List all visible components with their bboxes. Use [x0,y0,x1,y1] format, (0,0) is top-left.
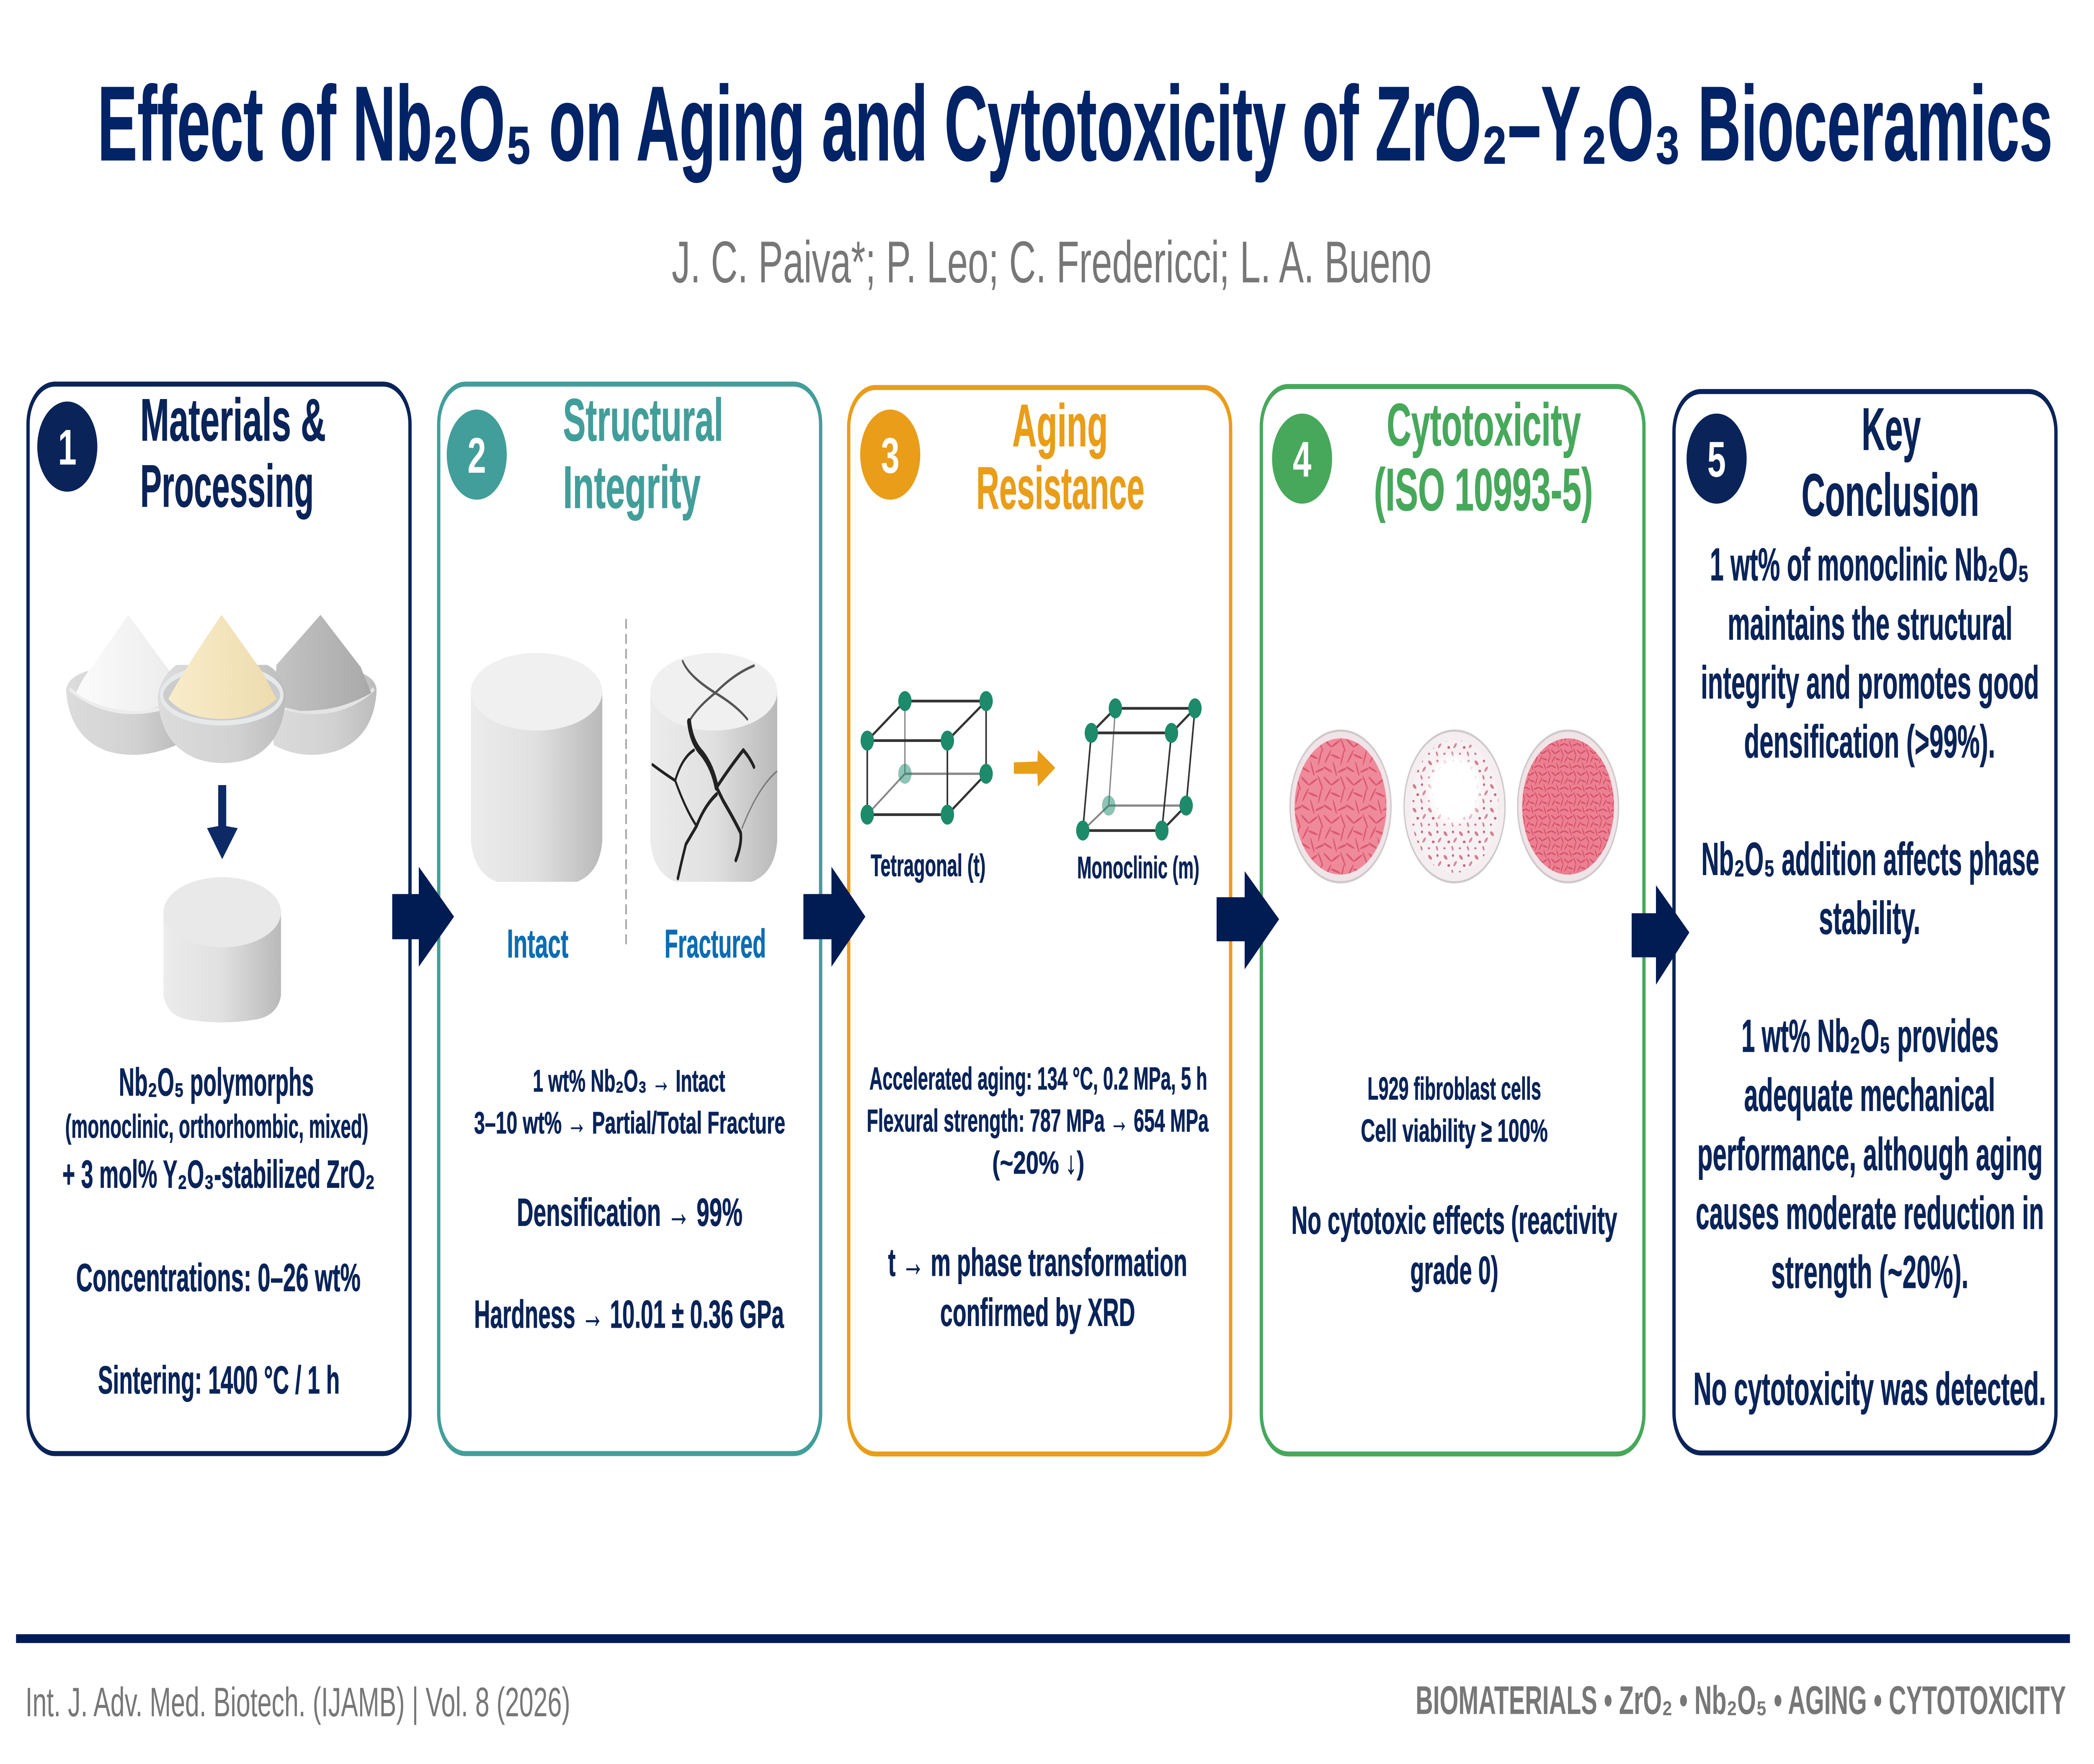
label: fractured: Fractured [665,921,766,966]
arrow: phase transformation [1014,750,1055,786]
text: structural details: 1 wt% Nb₂O₃ → Intact [533,1064,725,1098]
step number 5 [1687,414,1747,504]
panel: key conclusion [1674,391,2056,1453]
text: conclusions [1693,538,2046,1414]
heading: cytotoxicity: (ISO 10993-5) [1374,456,1593,523]
text: conclusions: strength (~20%). [1771,1246,1968,1298]
footer: journal citation: Int. J. Adv. Med. Biotech. (IJAMB) | Vol. 8 (2026) [26,1679,570,1725]
step number 3 [860,409,920,500]
step number 2: 2 [467,427,486,484]
heading: key conclusion: Key [1862,396,1921,463]
text: materials details: Nb₂O₅ polymorphs [119,1060,314,1104]
heading: aging resistance: Aging [1012,392,1108,459]
text: materials details: + 3 mol% Y₂O₃-stabilized ZrO₂ [62,1152,375,1196]
heading: aging resistance [976,392,1145,522]
icon: petri dishes [1290,731,1619,882]
label: intact: Intact [507,921,568,966]
step number 4 [1272,414,1332,504]
footer rule [16,1634,2070,1643]
text: materials details [62,1060,375,1402]
icon: tetragonal lattice [861,691,993,824]
step number 3: 3 [881,427,900,484]
label: monoclinic: Monoclinic (m) [1077,851,1199,885]
text: cytotoxicity details: Cell viability ≥ 100% [1361,1112,1548,1149]
arrow: step 4 to 5 [1632,885,1689,985]
text: conclusions: stability. [1819,892,1920,944]
arrow: step 1 to 2 [392,867,454,967]
heading: structural integrity: Integrity [563,454,701,521]
step number 4: 4 [1293,431,1311,487]
heading: key conclusion [1802,396,1979,528]
panel: cytotoxicity [1261,386,1644,1454]
text: conclusions: 1 wt% Nb₂O₅ provides [1741,1010,1999,1062]
text: materials details: (monoclinic, orthorhombic, mixed) [65,1108,368,1145]
text: structural details: Hardness → 10.01 ± 0.36 GPa [474,1293,784,1336]
heading: structural integrity [563,386,723,521]
icon: intact cylinder [471,653,602,882]
label: tetragonal: Tetragonal (t) [871,849,985,883]
panel: materials and processing [28,384,410,1454]
chart: crystal lattices [861,691,1202,840]
step number 1 [37,402,97,492]
icon: dish with dense cells [1518,731,1619,882]
icon: dish with confluent cells [1290,731,1391,882]
text: cytotoxicity details: grade 0) [1410,1248,1498,1292]
text: cytotoxicity details: No cytotoxic effects (reactivity [1292,1198,1617,1242]
text: cytotoxicity details [1292,1071,1617,1292]
icon: dish with dead cells [1404,731,1505,882]
text: materials details: Concentrations: 0–26 wt% [76,1256,361,1300]
heading: materials and processing [140,386,326,520]
step number 1: 1 [58,419,77,476]
text: aging details: confirmed by XRD [940,1290,1135,1334]
heading: aging resistance: Resistance [976,454,1145,522]
heading: cytotoxicity [1374,391,1593,523]
text: aging details [867,1061,1209,1334]
text: conclusions: maintains the structural [1728,597,2012,649]
icon: sintered disc [163,877,281,1022]
heading: materials and processing: Materials & [140,386,326,453]
text: structural details [474,1064,785,1336]
divider: dashed line [626,619,627,948]
panel: aging resistance [848,388,1230,1454]
authors: J. C. Paiva*; P. Leo; C. Fredericci; L. A. Bueno [672,229,1431,295]
text: materials details: Sintering: 1400 °C / 1 h [98,1358,340,1402]
heading: structural integrity: Structural [563,386,723,453]
text: aging details: t → m phase transformation [888,1240,1187,1284]
text: aging details: Flexural strength: 787 MPa → 654 MPa [867,1102,1209,1138]
text: conclusions: adequate mechanical [1744,1069,1995,1121]
arrow: down [207,785,238,859]
text: cytotoxicity details: L929 fibroblast cells [1367,1071,1541,1106]
heading: materials and processing: Processing [140,453,314,520]
icon: monoclinic lattice [1076,698,1202,840]
step number 5: 5 [1707,431,1726,487]
text: aging details: Accelerated aging: 134 °C, 0.2 MPa, 5 h [869,1061,1207,1097]
step number 2 [447,409,507,500]
text: conclusions: densification (>99%). [1744,716,1995,767]
icon: fractured cylinder [650,653,777,882]
heading: cytotoxicity: Cytotoxicity [1387,391,1581,458]
panel: structural integrity [439,384,821,1454]
heading: key conclusion: Conclusion [1802,461,1979,528]
text: aging details: (~20% ↓) [992,1145,1084,1180]
icon: powder bowls [66,615,377,763]
text: structural details: 3–10 wt% → Partial/Total Fracture [474,1106,785,1141]
arrow: step 2 to 3 [803,867,865,967]
text: structural details: Densification → 99% [517,1190,743,1234]
arrow: step 3 to 4 [1217,871,1279,969]
